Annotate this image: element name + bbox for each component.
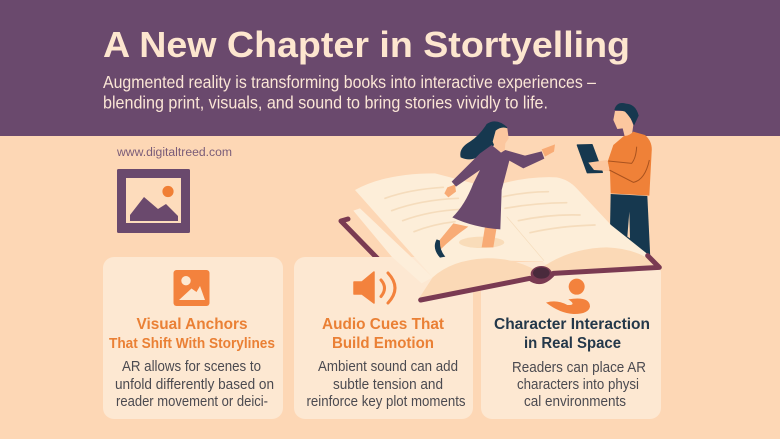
card 1 heading [109,316,275,352]
face [493,128,509,152]
card 3 body: Readers can place AR [512,360,646,376]
website url: www.digitaltreed.com [116,147,232,159]
panel: card 2 [294,257,473,419]
book left page [355,173,545,277]
book lower flaps [418,258,538,299]
hand right [542,144,555,157]
card 1 heading: Visual Anchors [136,316,248,333]
shadow [459,237,504,248]
card 2 body [306,359,466,410]
card 2 heading: Audio Cues That [322,316,444,333]
woman stepping from the book [435,121,555,258]
book cover edge [421,256,659,300]
icon: character in hand [546,279,590,314]
neck and face [613,111,633,138]
man with tablet [577,103,652,258]
card 3 body: cal environments [524,394,626,410]
book left under-page [353,208,433,283]
card 1 body [115,359,274,410]
card 3 body: characters into physi [517,377,639,393]
header band [0,0,780,136]
hand [588,160,609,171]
card 2 body: Ambient sound can add [318,359,458,375]
card 3 heading: Character Interaction [494,316,650,333]
card 1 body: reader movement or deici- [116,394,268,410]
card 2 heading [322,316,444,352]
icon: speaker [354,272,395,303]
panel: card 3 [481,262,661,419]
dress [452,145,544,229]
hand left [444,185,456,197]
hair [460,121,507,159]
card 3 heading: in Real Space [524,335,621,352]
book right page [473,177,655,264]
subtitle [103,72,596,112]
card 2 body: subtle tension and [333,377,443,393]
text lines on pages [385,187,595,233]
card 2 body: reinforce key plot moments [306,394,466,410]
card 3 body [512,360,646,410]
icon: image placeholder [117,169,190,233]
hair [614,103,639,126]
subtitle: Augmented reality is transforming books into interactive experiences – [103,72,596,92]
trousers [610,194,650,258]
card 1 body: AR allows for scenes to [122,359,261,375]
legs [438,223,468,250]
panel: card 1 [103,257,283,419]
card 1 body: unfold differently based on [115,377,274,393]
card 3 heading [494,316,650,352]
page gutter [507,217,544,261]
book back cover left strip [341,219,378,259]
tablet [577,145,602,173]
shoe [435,239,445,258]
book spine knob [531,266,552,282]
subtitle: blending print, visuals, and sound to bring stories vividly to life. [103,92,548,112]
card 1 heading: That Shift With Storylines [109,335,275,352]
title: A New Chapter in Stortyelling [103,24,630,65]
icon: picture [174,270,210,306]
card 2 heading: Build Emotion [332,335,434,352]
open book [353,173,659,300]
sweater [608,132,652,196]
arm lines [608,147,649,182]
